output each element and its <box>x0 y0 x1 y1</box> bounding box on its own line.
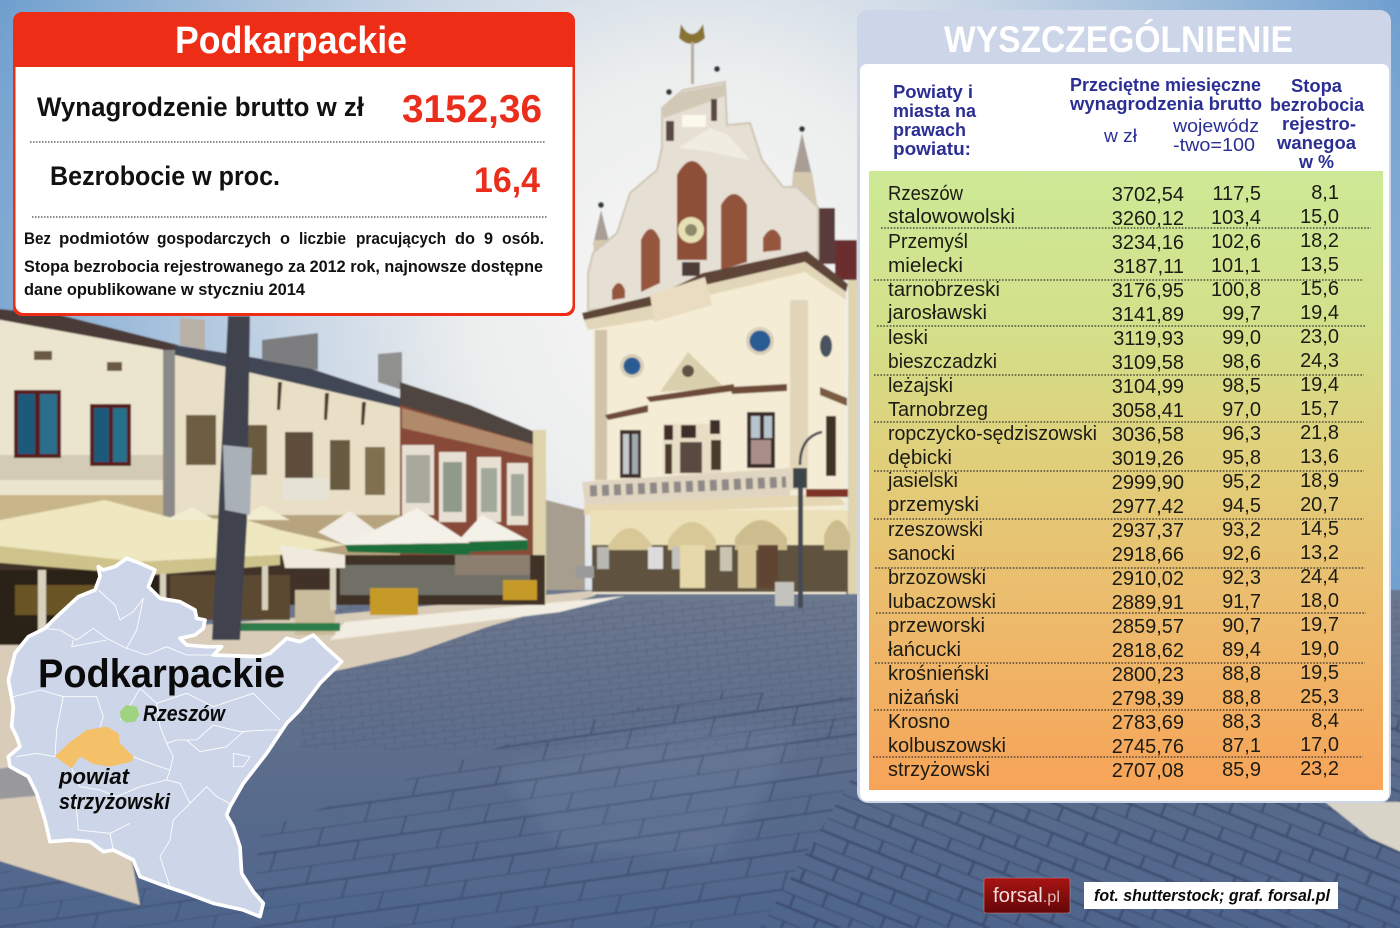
row: ropczycko-sędziszowski: ropczycko-sędziszowski <box>888 423 1097 445</box>
row: stalowowolski: 15,0 <box>1300 206 1339 228</box>
row: strzyżowski: strzyżowski <box>888 759 990 781</box>
hall windows <box>620 412 836 478</box>
row: leżajski: leżajski <box>888 375 953 397</box>
town hall <box>576 24 858 608</box>
credit: fot. shutterstock; graf. forsal.pl <box>1094 886 1331 905</box>
brick building <box>400 382 546 605</box>
label: powiat strzyżowski: strzyżowski <box>59 789 171 814</box>
row: niżański: 2798,39 <box>1112 688 1184 710</box>
table column heading: wages: w zł <box>1103 126 1137 146</box>
unemployment value: 16,4 <box>474 161 541 200</box>
row: mielecki: mielecki <box>888 255 963 277</box>
label: powiat strzyżowski: powiat <box>58 764 131 789</box>
row: krośnieński: 2800,23 <box>1112 664 1184 686</box>
row: leski: 23,0 <box>1300 326 1339 348</box>
row: Krosno: Krosno <box>888 711 950 733</box>
row: kolbuszowski: 2745,76 <box>1112 736 1184 758</box>
row: krośnieński: 19,5 <box>1300 662 1339 684</box>
map title: Podkarpackie <box>38 652 285 696</box>
table panel frame <box>857 10 1391 803</box>
row: dębicki: 13,6 <box>1300 446 1339 468</box>
row: kolbuszowski: 87,1 <box>1222 735 1261 757</box>
row: Tarnobrzeg: 97,0 <box>1222 399 1261 421</box>
row: mielecki: 101,1 <box>1211 255 1261 277</box>
table column heading: district: miasta na <box>893 101 977 121</box>
footnote: osób. <box>502 229 544 248</box>
row: dębicki <box>888 446 1339 470</box>
footnote: podmiotów <box>59 229 150 248</box>
row: tarnobrzeski: tarnobrzeski <box>888 279 1000 301</box>
table title: WYSZCZEGÓLNIENIE <box>944 18 1293 60</box>
row: dębicki: 95,8 <box>1222 447 1261 469</box>
row: leski <box>888 326 1339 350</box>
table rows <box>887 182 1339 782</box>
footnote: Bez <box>24 229 51 248</box>
row: leski: leski <box>888 327 928 349</box>
row: tarnobrzeski: 100,8 <box>1211 279 1261 301</box>
row: Tarnobrzeg: 15,7 <box>1300 398 1339 420</box>
far trees and street <box>546 500 585 590</box>
sky <box>0 0 1400 640</box>
row: Krosno: 2783,69 <box>1112 712 1184 734</box>
row: Krosno: 88,3 <box>1222 711 1261 733</box>
row: jarosławski: 3141,89 <box>1112 304 1184 326</box>
row: leski: 99,0 <box>1222 327 1261 349</box>
footnote: o <box>280 229 290 248</box>
table column heading: district <box>893 82 977 159</box>
row: niżański <box>888 686 1339 710</box>
row: łańcucki: łańcucki <box>888 639 961 661</box>
lamp post <box>212 316 252 640</box>
cafe area under umbrellas <box>0 555 545 645</box>
row: bieszczadzki <box>888 350 1339 374</box>
map of Podkarpackie <box>8 558 342 917</box>
table column heading: wages <box>1069 75 1262 155</box>
row: brzozowski: brzozowski <box>888 567 986 589</box>
wage label: Wynagrodzenie brutto w zł <box>37 92 364 122</box>
row: przemyski: przemyski <box>888 494 979 516</box>
Rzeszów highlight <box>120 705 139 723</box>
table column heading: unemployment: bezrobocia <box>1270 95 1365 115</box>
row: jasielski: 95,2 <box>1222 471 1261 493</box>
table column heading: district: powiatu: <box>893 139 971 159</box>
row: leżajski: 98,5 <box>1222 375 1261 397</box>
row: jasielski <box>887 470 1339 494</box>
table column heading: district: prawach <box>893 120 966 140</box>
table column heading: unemployment <box>1270 76 1365 172</box>
row: jarosławski: 19,4 <box>1300 302 1339 324</box>
row: kolbuszowski <box>888 734 1339 758</box>
logo: forsal.pl: forsal.pl <box>993 885 1060 907</box>
row: brzozowski: 92,3 <box>1222 567 1261 589</box>
row: bieszczadzki: 24,3 <box>1300 350 1339 372</box>
row: sanocki: 13,2 <box>1300 542 1339 564</box>
row: jasielski: 18,9 <box>1300 470 1339 492</box>
row: ropczycko-sędziszowski: 96,3 <box>1222 423 1261 445</box>
middle townhouse <box>175 318 402 555</box>
row: Przemyśl: 18,2 <box>1300 230 1339 252</box>
row: bieszczadzki: 3109,58 <box>1112 352 1184 374</box>
row: krośnieński <box>888 662 1339 686</box>
row: łańcucki: 2818,62 <box>1112 640 1184 662</box>
row: stalowowolski: stalowowolski <box>888 206 1015 228</box>
row: brzozowski <box>888 566 1339 590</box>
row: łańcucki: 19,0 <box>1300 638 1339 660</box>
table column heading: district: Powiaty i <box>893 82 973 102</box>
row: Tarnobrzeg <box>888 398 1339 422</box>
row: jasielski: jasielski <box>887 470 958 492</box>
round windows <box>620 327 832 378</box>
row: krośnieński: krośnieński <box>888 663 989 685</box>
footnote: dane opublikowane w styczniu 2014 <box>24 280 306 299</box>
row: przemyski: 94,5 <box>1222 495 1261 517</box>
row: strzyżowski <box>888 758 1339 782</box>
row: niżański: niżański <box>888 687 959 709</box>
row: kolbuszowski: 17,0 <box>1300 734 1339 756</box>
map outline <box>8 558 342 917</box>
row: Tarnobrzeg: Tarnobrzeg <box>888 399 988 421</box>
row: przeworski: 2859,57 <box>1112 616 1184 638</box>
row: Rzeszów: Rzeszów <box>888 183 964 205</box>
row: stalowowolski: 3260,12 <box>1112 208 1184 230</box>
row: dębicki: 3019,26 <box>1112 448 1184 470</box>
row: brzozowski: 24,4 <box>1300 566 1339 588</box>
table column heading: unemployment: wanegoa <box>1276 133 1357 153</box>
row: Krosno: 8,4 <box>1311 710 1339 732</box>
row: sanocki: sanocki <box>888 543 955 565</box>
credit <box>1084 882 1338 909</box>
row: przeworski: 19,7 <box>1300 614 1339 636</box>
table column heading: wages: Przeciętne miesięczne <box>1070 75 1261 95</box>
street lamp <box>793 432 822 608</box>
row: tarnobrzeski: 15,6 <box>1300 278 1339 300</box>
row: niżański: 25,3 <box>1300 686 1339 708</box>
row: strzyżowski: 23,2 <box>1300 758 1339 780</box>
footnote: do <box>455 229 475 248</box>
footnote: Stopa bezrobocia rejestrowanego za 2012 rok, najnowsze dostępne <box>24 257 543 276</box>
row: ropczycko-sędziszowski: 3036,58 <box>1112 424 1184 446</box>
footnote: 9 <box>484 229 493 248</box>
row: przeworski <box>888 614 1339 638</box>
row: Rzeszów: 117,5 <box>1212 183 1261 205</box>
table column heading: wages: wojewódz <box>1172 116 1259 136</box>
row: tarnobrzeski: 3176,95 <box>1112 280 1184 302</box>
row: mielecki: 3187,11 <box>1113 256 1184 278</box>
row: łańcucki: 89,4 <box>1222 639 1261 661</box>
row: bieszczadzki: bieszczadzki <box>888 351 997 373</box>
row: jasielski: 2999,90 <box>1112 472 1184 494</box>
panel title: Podkarpackie <box>175 20 407 62</box>
row: stalowowolski <box>888 206 1339 230</box>
footnote: pracujących <box>356 229 446 248</box>
clock <box>678 217 704 243</box>
row: rzeszowski <box>888 518 1339 542</box>
row: przemyski: 2977,42 <box>1112 496 1184 518</box>
wage value: 3152,36 <box>402 88 542 131</box>
footnote: liczbie <box>299 229 346 248</box>
panel: regional summary <box>13 12 575 316</box>
row: ropczycko-sędziszowski <box>888 422 1339 446</box>
panel frame and red header <box>13 12 575 316</box>
row: łańcucki <box>888 638 1339 662</box>
row: leski: 3119,93 <box>1113 328 1184 350</box>
row: Przemyśl <box>888 230 1339 254</box>
row: ropczycko-sędziszowski: 21,8 <box>1300 422 1339 444</box>
row: leżajski <box>888 374 1339 398</box>
row: strzyżowski: 2707,08 <box>1112 760 1184 782</box>
row: rzeszowski: 2937,37 <box>1112 520 1184 542</box>
row: lubaczowski: lubaczowski <box>888 591 996 613</box>
row: Rzeszów <box>888 182 1339 206</box>
row: Rzeszów: 8,1 <box>1311 182 1339 204</box>
row: przemyski: 20,7 <box>1300 494 1339 516</box>
row: Przemyśl: 3234,16 <box>1112 232 1184 254</box>
table column heading: wages: -two=100 <box>1173 135 1255 155</box>
unemployment label: Bezrobocie w proc. <box>50 161 280 191</box>
row: Tarnobrzeg: 3058,41 <box>1112 400 1184 422</box>
row: przeworski: przeworski <box>888 615 985 637</box>
row: rzeszowski: 14,5 <box>1300 518 1339 540</box>
eagle and spire <box>679 24 705 84</box>
row: tarnobrzeski <box>888 278 1339 302</box>
label: powiat strzyżowski <box>58 764 171 814</box>
row: lubaczowski: 91,7 <box>1222 591 1261 613</box>
row: lubaczowski <box>888 590 1339 614</box>
footnote: gospodarczych <box>157 229 271 248</box>
row: brzozowski: 2910,02 <box>1112 568 1184 590</box>
label: Rzeszów: Rzeszów <box>143 701 227 726</box>
row: rzeszowski: rzeszowski <box>888 519 983 541</box>
panel: table <box>857 10 1391 803</box>
row: kolbuszowski: kolbuszowski <box>888 735 1006 757</box>
row: leżajski: 3104,99 <box>1112 376 1184 398</box>
row: Rzeszów: 3702,54 <box>1112 184 1184 206</box>
table column heading: wages: wynagrodzenia brutto <box>1069 94 1262 114</box>
row: leżajski: 19,4 <box>1300 374 1339 396</box>
logo: forsal.pl <box>984 878 1070 913</box>
row: Przemyśl: 102,6 <box>1211 231 1261 253</box>
powiat strzyżowski highlight <box>55 727 133 768</box>
table column heading: unemployment: w % <box>1298 152 1334 172</box>
row: jarosławski: jarosławski <box>887 302 987 324</box>
pavement <box>0 590 1400 928</box>
row: przeworski: 90,7 <box>1222 615 1261 637</box>
table column heading: unemployment: rejestro- <box>1282 114 1356 134</box>
left cream building <box>0 308 178 525</box>
row: sanocki: 92,6 <box>1222 543 1261 565</box>
ground arcade <box>590 510 848 550</box>
row: jarosławski: 99,7 <box>1222 303 1261 325</box>
row: krośnieński: 88,8 <box>1222 663 1261 685</box>
row: Przemyśl: Przemyśl <box>888 231 968 253</box>
umbrellas <box>0 500 528 575</box>
row: strzyżowski: 85,9 <box>1222 759 1261 781</box>
row: lubaczowski: 2889,91 <box>1112 592 1184 614</box>
row: jarosławski <box>887 302 1339 326</box>
row: sanocki: 2918,66 <box>1112 544 1184 566</box>
table data background <box>869 171 1383 790</box>
row: mielecki <box>888 254 1339 278</box>
footnote <box>24 229 544 299</box>
table column heading: unemployment: Stopa <box>1291 76 1343 96</box>
row: lubaczowski: 18,0 <box>1300 590 1339 612</box>
balcony <box>582 468 790 505</box>
row: niżański: 88,8 <box>1222 687 1261 709</box>
sunlit sidewalk <box>0 590 600 905</box>
row: Krosno <box>888 710 1339 734</box>
row: sanocki <box>888 542 1339 566</box>
row: rzeszowski: 93,2 <box>1222 519 1261 541</box>
row: bieszczadzki: 98,6 <box>1222 351 1261 373</box>
row: przemyski <box>888 494 1339 518</box>
row: dębicki: dębicki <box>888 447 952 469</box>
row: mielecki: 13,5 <box>1300 254 1339 276</box>
row: stalowowolski: 103,4 <box>1211 207 1261 229</box>
